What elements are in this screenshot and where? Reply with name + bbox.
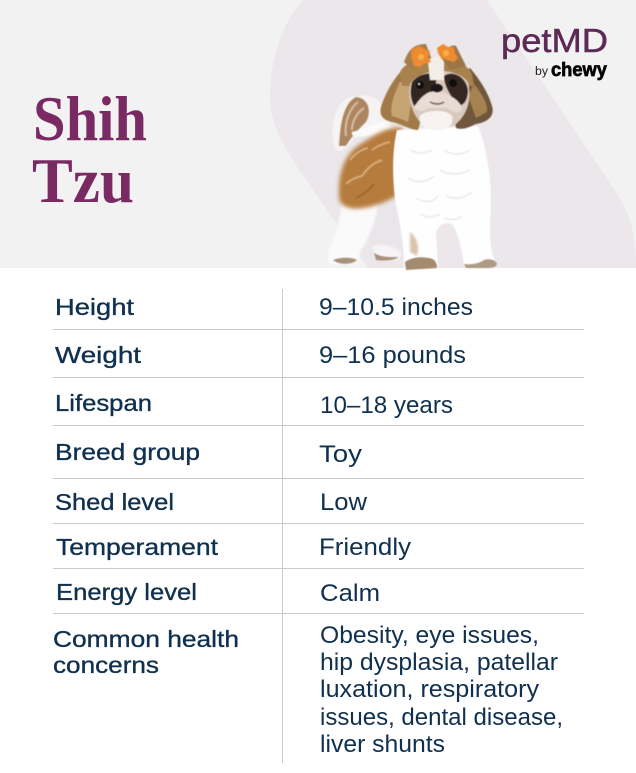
table row: temperament <box>56 534 412 561</box>
title: Tzu <box>32 146 134 216</box>
table dividers <box>53 289 584 763</box>
table row: shed level: Low <box>320 489 367 516</box>
table row: energy level: Energy level <box>56 579 197 605</box>
dog head ears <box>380 44 493 130</box>
dog rear paws <box>333 253 398 264</box>
table row: weight <box>55 342 466 369</box>
dog hair bows <box>411 44 458 67</box>
dog brown leg mark <box>410 232 418 256</box>
table row: common health concerns: liver shunts <box>320 731 445 758</box>
table row: breed group <box>55 439 363 468</box>
table row: lifespan: 10–18 years <box>320 392 453 419</box>
table row: energy level: Calm <box>320 580 380 607</box>
title: Shih <box>33 84 147 154</box>
table row: temperament: Temperament <box>56 534 219 560</box>
table row: common health concerns: concerns <box>53 652 159 678</box>
table row: height <box>55 294 473 321</box>
table row: weight: 9–16 pounds <box>319 342 466 369</box>
dog rear coat fur <box>346 142 390 198</box>
dog rear brown coat <box>339 128 408 208</box>
table row: energy level <box>56 579 380 607</box>
table row: lifespan: Lifespan <box>55 390 152 416</box>
table row: shed level: Shed level <box>55 489 174 515</box>
table row: lifespan <box>55 390 453 419</box>
dog white chest and front legs <box>393 126 497 268</box>
dog face <box>409 56 470 130</box>
table row: breed group: Breed group <box>55 439 200 465</box>
table row: temperament: Friendly <box>319 534 412 561</box>
background blob shape <box>270 0 636 268</box>
table row: common health concerns: Common health <box>53 626 239 652</box>
title <box>32 84 147 216</box>
table row: common health concerns: issues, dental disease, <box>320 704 563 731</box>
table row: weight: Weight <box>55 342 142 368</box>
dog front paws <box>405 257 497 270</box>
logo: petMD by chewy: chewy <box>551 60 607 81</box>
dog photo illustration <box>328 44 497 270</box>
table row: common health concerns: luxation, respiratory <box>320 676 540 703</box>
dog rear legs <box>328 196 406 264</box>
table row: common health concerns <box>53 622 563 758</box>
logo: petMD by chewy <box>501 22 608 81</box>
logo: petMD by chewy: by <box>535 66 548 78</box>
table row: common health concerns: Obesity, eye issues, <box>320 622 539 649</box>
table row: height: 9–10.5 inches <box>319 294 473 321</box>
logo: petMD by chewy: petMD <box>501 22 608 59</box>
table row: shed level <box>55 489 367 516</box>
table row: common health concerns: hip dysplasia, patellar <box>320 649 558 676</box>
dog tail <box>333 95 392 151</box>
table row: height: Height <box>55 294 135 320</box>
table row: breed group: Toy <box>319 441 363 468</box>
panel: header background <box>0 0 636 268</box>
dog fur shading <box>408 150 472 220</box>
